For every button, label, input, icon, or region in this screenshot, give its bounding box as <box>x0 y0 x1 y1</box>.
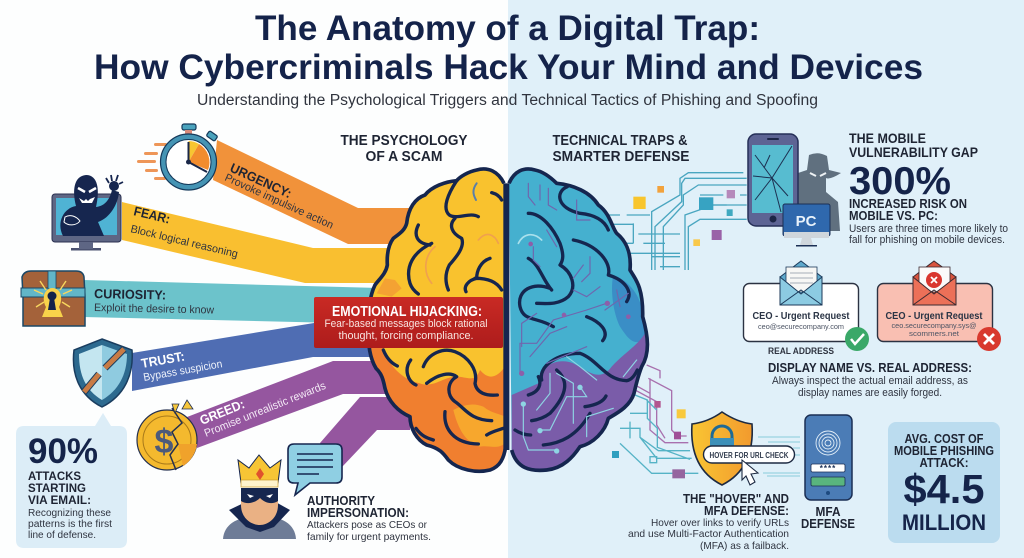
heading: psychology of a scam <box>340 133 468 165</box>
text: hover and mfa defense: (MFA) as a failback. <box>700 540 789 552</box>
label: real address: REAL ADDRESS <box>768 346 834 357</box>
callout: cost of attack: $4.5 <box>904 466 984 512</box>
brain: right hemisphere <box>509 169 647 470</box>
text: authority impersonation: Attackers pose as CEOs or <box>307 519 427 531</box>
band: urgency <box>213 140 420 244</box>
brain: left hemisphere <box>369 169 506 471</box>
callout: 90 percent: Recognizing these <box>28 508 111 519</box>
band: curiosity: Exploit the desire to know <box>94 302 214 317</box>
callout: cost of attack: ATTACK: <box>920 456 968 470</box>
band: authority <box>320 397 410 467</box>
text: hover and mfa defense <box>628 492 789 552</box>
text: display name vs real address: DISPLAY NAME VS. REAL ADDRESS: <box>768 360 972 375</box>
text: mobile vulnerability gap: INCREASED RISK ON <box>849 196 967 211</box>
callout: cost of attack: MILLION <box>902 510 986 535</box>
band: trust: TRUST: <box>140 349 186 371</box>
heading: psychology of a scam: OF A SCAM <box>366 149 442 165</box>
text: display name vs real address <box>768 360 972 399</box>
email card: fake: ceo.securecompany.sys@ <box>892 321 976 330</box>
callout: 90 percent: STARTING <box>28 481 86 495</box>
text: mobile vulnerability gap <box>849 131 1008 246</box>
icon: pc monitor <box>783 204 830 246</box>
icon: cracked coin: $ <box>155 423 174 461</box>
band: greed: GREED: <box>198 396 247 428</box>
band: fear <box>122 202 400 283</box>
callout: cost of attack: MOBILE PHISHING <box>894 444 994 458</box>
label: mfa defense: MFA <box>816 505 840 519</box>
icon: mfa phone <box>805 415 852 500</box>
callout: emotional hijacking: thought, forcing compliance. <box>338 330 474 342</box>
callout: 90 percent: VIA EMAIL: <box>28 493 91 507</box>
text: mobile vulnerability gap: Users are three times more likely to <box>849 223 1008 235</box>
callout: emotional hijacking: EMOTIONAL HIJACKING: <box>332 304 482 320</box>
circuit: upper right <box>605 173 747 270</box>
brain: centre divide <box>503 183 509 450</box>
icon: spy silhouette <box>798 153 841 231</box>
title: The Anatomy of a Digital Trap: <box>255 9 760 48</box>
icon: treasure chest <box>21 271 85 326</box>
icon: villain in monitor <box>52 175 123 250</box>
email card: fake: CEO - Urgent Request <box>886 310 983 322</box>
text: display name vs real address: Always inspect the actual email address, as <box>772 375 968 387</box>
text: hover and mfa defense: THE "HOVER" AND <box>683 492 789 506</box>
heading: technical traps <box>552 133 690 165</box>
text: mobile vulnerability gap: MOBILE VS. PC: <box>849 208 938 223</box>
callout: emotional hijacking: Fear-based messages block rational <box>324 318 488 330</box>
text: hover and mfa defense: Hover over links to verify URLs <box>651 517 789 529</box>
text: authority impersonation: family for urgent payments. <box>307 531 431 543</box>
band: trust <box>132 322 395 391</box>
icon: mfa phone: **** <box>820 464 836 473</box>
band: greed <box>187 361 395 448</box>
callout: 90 percent <box>16 413 127 548</box>
band: fear: Block logical reasoning <box>129 223 239 261</box>
label: mfa defense: DEFENSE <box>801 517 855 531</box>
icon: stopwatch <box>137 124 218 190</box>
callout: emotional hijacking <box>314 297 503 348</box>
text: mobile vulnerability gap: fall for phishing on mobile devices. <box>849 234 1005 246</box>
email card: real: ceo@securecompany.com <box>758 322 844 331</box>
icon: crowned impersonator <box>223 455 296 539</box>
email card: fake <box>878 261 1001 351</box>
icon: hover shield <box>692 412 794 485</box>
label: mfa defense <box>801 505 855 531</box>
band: curiosity: CURIOSITY: <box>94 286 166 303</box>
text: hover and mfa defense: MFA DEFENSE: <box>704 504 789 518</box>
small square near brain <box>612 451 619 458</box>
brain <box>369 169 647 471</box>
callout: 90 percent: line of defense. <box>28 530 96 541</box>
email card: fake: scommers.net <box>909 329 960 338</box>
band: urgency: Provoke impulsive action <box>223 172 335 232</box>
band: fear: FEAR: <box>132 203 172 227</box>
subtitle: Understanding the Psychological Triggers and Technical Tactics of Phishing and Spoofing <box>197 92 818 109</box>
icon: shield with broken chain <box>73 339 132 407</box>
icon: hover shield: HOVER FOR URL CHECK <box>710 451 789 460</box>
text: mobile vulnerability gap: THE MOBILE <box>849 131 926 146</box>
email card: real: CEO - Urgent Request <box>752 310 850 322</box>
heading: psychology of a scam: THE PSYCHOLOGY <box>340 133 468 149</box>
band: urgency: URGENCY: <box>228 160 294 201</box>
text: mobile vulnerability gap: VULNERABILITY GAP <box>849 145 978 160</box>
title: How Cybercriminals Hack Your Mind and Devices <box>94 48 923 87</box>
callout: 90 percent: patterns is the first <box>28 519 112 530</box>
callout: 90 percent: ATTACKS <box>28 469 81 483</box>
text: mobile vulnerability gap: 300% <box>849 160 951 203</box>
text: authority impersonation: AUTHORITY <box>307 494 376 508</box>
heading: technical traps: SMARTER DEFENSE <box>552 149 690 165</box>
icon: cracked coin <box>137 400 197 470</box>
text: hover and mfa defense: and use Multi-Factor Authentication <box>628 528 789 540</box>
band: trust: Bypass suspicion <box>142 358 223 384</box>
icon: pc monitor: PC <box>796 213 817 230</box>
callout: cost of attack: AVG. COST OF <box>904 432 984 446</box>
callout: 90 percent: 90% <box>28 432 98 471</box>
icon: speech bubble <box>288 444 342 495</box>
text: authority impersonation <box>307 494 431 543</box>
band: greed: Promise unrealistic rewards <box>203 380 328 440</box>
text: display name vs real address: display names are easily forged. <box>798 387 942 399</box>
title <box>94 9 923 87</box>
text: authority impersonation: IMPERSONATION: <box>307 506 409 520</box>
heading: technical traps: TECHNICAL TRAPS & <box>552 133 688 149</box>
circuit: lower right <box>620 365 698 478</box>
email card: real <box>744 261 869 351</box>
circuit: hover to mfa connectors <box>758 437 800 476</box>
icon: cracked phone <box>748 134 798 226</box>
band: curiosity <box>83 280 380 324</box>
callout: cost of attack <box>888 422 1000 543</box>
